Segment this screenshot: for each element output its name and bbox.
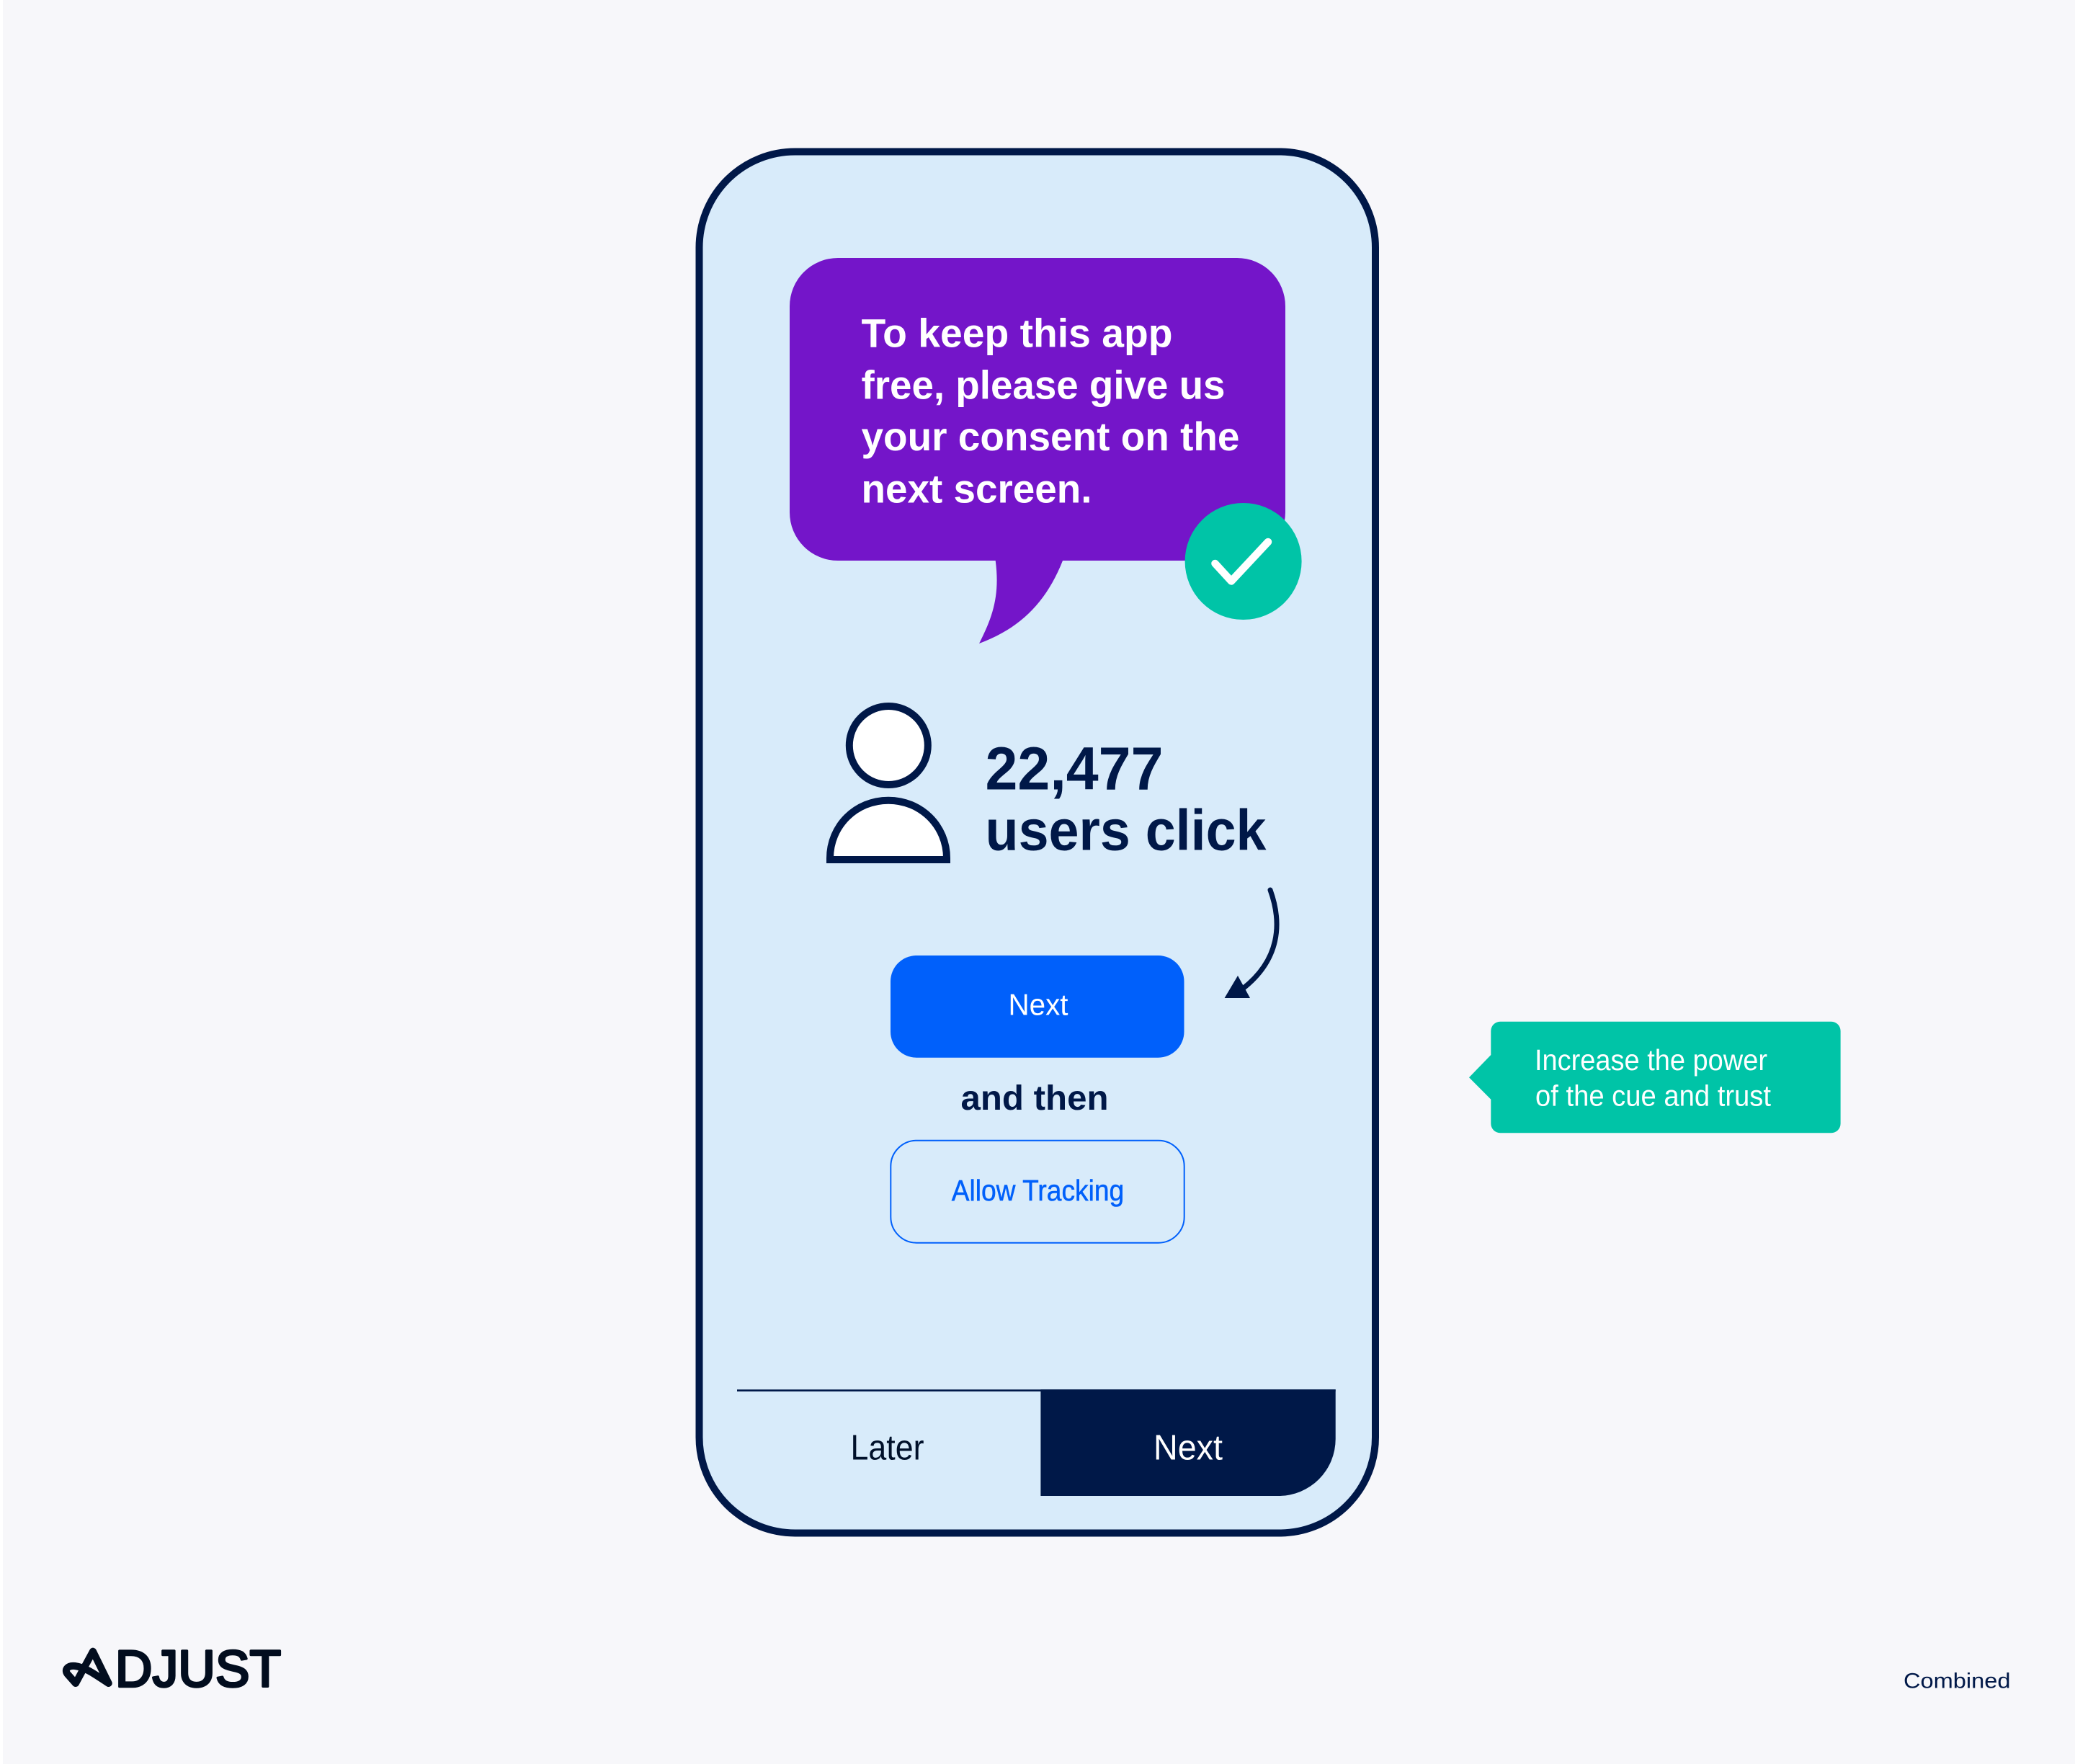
label: and then: and then	[961, 1079, 1108, 1118]
button: allow tracking: Allow Tracking	[952, 1174, 1124, 1207]
footer label: Combined: Combined	[1904, 1669, 2010, 1693]
statistic: users click: users click	[986, 798, 1267, 863]
callout: increase the power	[1469, 1022, 1841, 1133]
bubble message	[862, 311, 1239, 511]
logo wordmark: DJUST	[115, 1642, 281, 1698]
later option: Later	[850, 1428, 924, 1467]
bubble message: To keep this app	[862, 311, 1173, 356]
icon: user	[830, 706, 947, 860]
logo mark	[66, 1652, 109, 1683]
button: allow tracking	[891, 1141, 1184, 1243]
button: next: Next	[1009, 988, 1068, 1022]
callout: increase the power: Increase the power	[1535, 1043, 1767, 1077]
panel: phone	[699, 151, 1375, 1533]
speech bubble	[790, 258, 1285, 643]
bubble shape	[790, 258, 1285, 643]
bottom action bar	[737, 1389, 1336, 1496]
bubble message: your consent on the	[862, 414, 1239, 459]
logo: Adjust	[66, 1642, 281, 1698]
next option: Next	[1153, 1428, 1223, 1467]
statistic: users click	[986, 735, 1267, 863]
icon: check badge	[1185, 503, 1302, 620]
phone body	[699, 151, 1375, 1533]
bubble message: free, please give us	[862, 362, 1225, 407]
statistic: users click: 22,477	[986, 735, 1163, 803]
button: next	[891, 956, 1184, 1058]
bar divider	[737, 1389, 1336, 1391]
bubble message: next screen.	[862, 466, 1092, 511]
next option	[1040, 1389, 1336, 1496]
callout: increase the power: of the cue and trust	[1535, 1079, 1772, 1112]
arrow: to next button	[1225, 890, 1277, 998]
